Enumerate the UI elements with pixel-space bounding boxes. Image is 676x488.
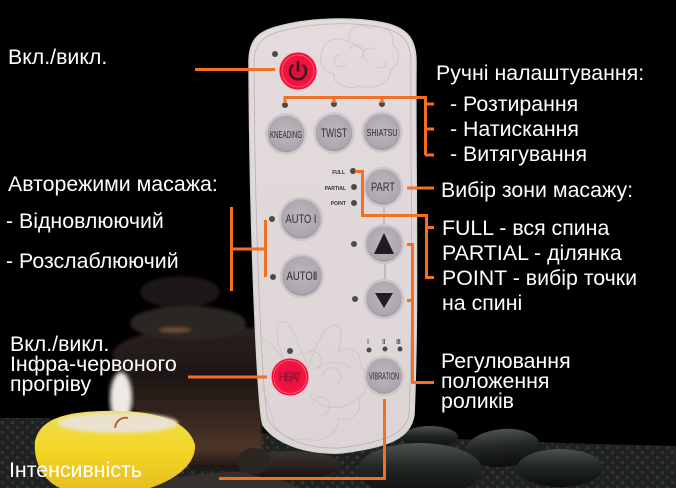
- label: zone options: FULL - вся спина: [442, 216, 609, 240]
- label: manual settings: Ручні налаштування:: [436, 61, 644, 85]
- label: zone options: на спині: [442, 291, 522, 315]
- label: roller position: роликів: [441, 389, 514, 413]
- up button: [365, 225, 403, 263]
- label: heating: прогріву: [10, 372, 92, 396]
- KNEADING button: KNEADING: [270, 129, 302, 141]
- remote body: [249, 19, 417, 453]
- PART button: [364, 168, 402, 206]
- VIBRATION button: [365, 357, 403, 395]
- label: zone selection: Вибір зони масажу:: [441, 178, 633, 202]
- HEAT button: [271, 358, 309, 396]
- indicator dots: [269, 51, 402, 354]
- stone stack: [112, 276, 262, 470]
- label: heating: Інфра-червоного: [10, 352, 177, 376]
- SHIATSU button: [362, 112, 402, 152]
- SHIATSU button: SHIATSU: [366, 127, 398, 139]
- vibration level marks: Ⅰ: [367, 338, 369, 346]
- TWIST button: TWIST: [321, 128, 347, 140]
- label: manual settings: - Витягування: [450, 142, 587, 166]
- remote control: Ⅱ: [382, 338, 385, 346]
- PARTIAL label: PARTIAL: [325, 186, 346, 192]
- AUTO I button: AUTO I: [286, 214, 316, 226]
- remote control: Ⅲ: [396, 338, 401, 346]
- floral pattern: bottom: [262, 322, 367, 440]
- pebble: left bottom: [140, 472, 300, 488]
- down button: [365, 280, 403, 318]
- floral pattern: top: [320, 26, 399, 87]
- label: auto modes: - Відновлюючий: [6, 209, 164, 233]
- label: roller position: Регулювання: [441, 349, 571, 373]
- photo: mat and stones: [0, 276, 676, 488]
- label: auto modes: [6, 172, 218, 273]
- TWIST button: [314, 114, 354, 152]
- VIBRATION button: VIBRATION: [369, 370, 399, 382]
- label: roller position: положення: [441, 369, 549, 393]
- AUTO II button: [281, 255, 323, 297]
- power button: [279, 52, 317, 90]
- AUTO II button: AUTOⅡ: [286, 271, 318, 283]
- label: power: Вкл./викл.: [8, 45, 107, 69]
- PART button: PART: [371, 182, 395, 194]
- remote control: [249, 19, 417, 453]
- label: roller position: [441, 349, 571, 413]
- KNEADING button: [266, 114, 306, 154]
- label: manual settings: [436, 61, 644, 166]
- label: heating: [10, 332, 177, 396]
- candle: [35, 372, 195, 488]
- label: intensity: Інтенсивність: [9, 458, 142, 482]
- label: zone options: PARTIAL - ділянка: [442, 241, 622, 265]
- connector lines: [384, 205, 385, 282]
- FULL label: FULL: [332, 170, 345, 176]
- HEAT button: HEAT: [278, 372, 302, 384]
- pebble: right middle: [402, 426, 458, 448]
- AUTO I button: [280, 198, 322, 240]
- label: auto modes: - Розслаблюючий: [6, 249, 179, 273]
- label: auto modes: Авторежими масажа:: [8, 172, 218, 196]
- orange callout lines: [188, 70, 434, 478]
- label: zone options: POINT - вибір точки: [442, 266, 637, 290]
- POINT label: POINT: [331, 201, 346, 207]
- label: zone options: [442, 216, 637, 315]
- label: manual settings: - Натискання: [450, 117, 579, 141]
- pebble: centre: [238, 451, 342, 479]
- label: heating: Вкл./викл.: [10, 332, 109, 356]
- label: manual settings: - Розтирання: [450, 92, 578, 116]
